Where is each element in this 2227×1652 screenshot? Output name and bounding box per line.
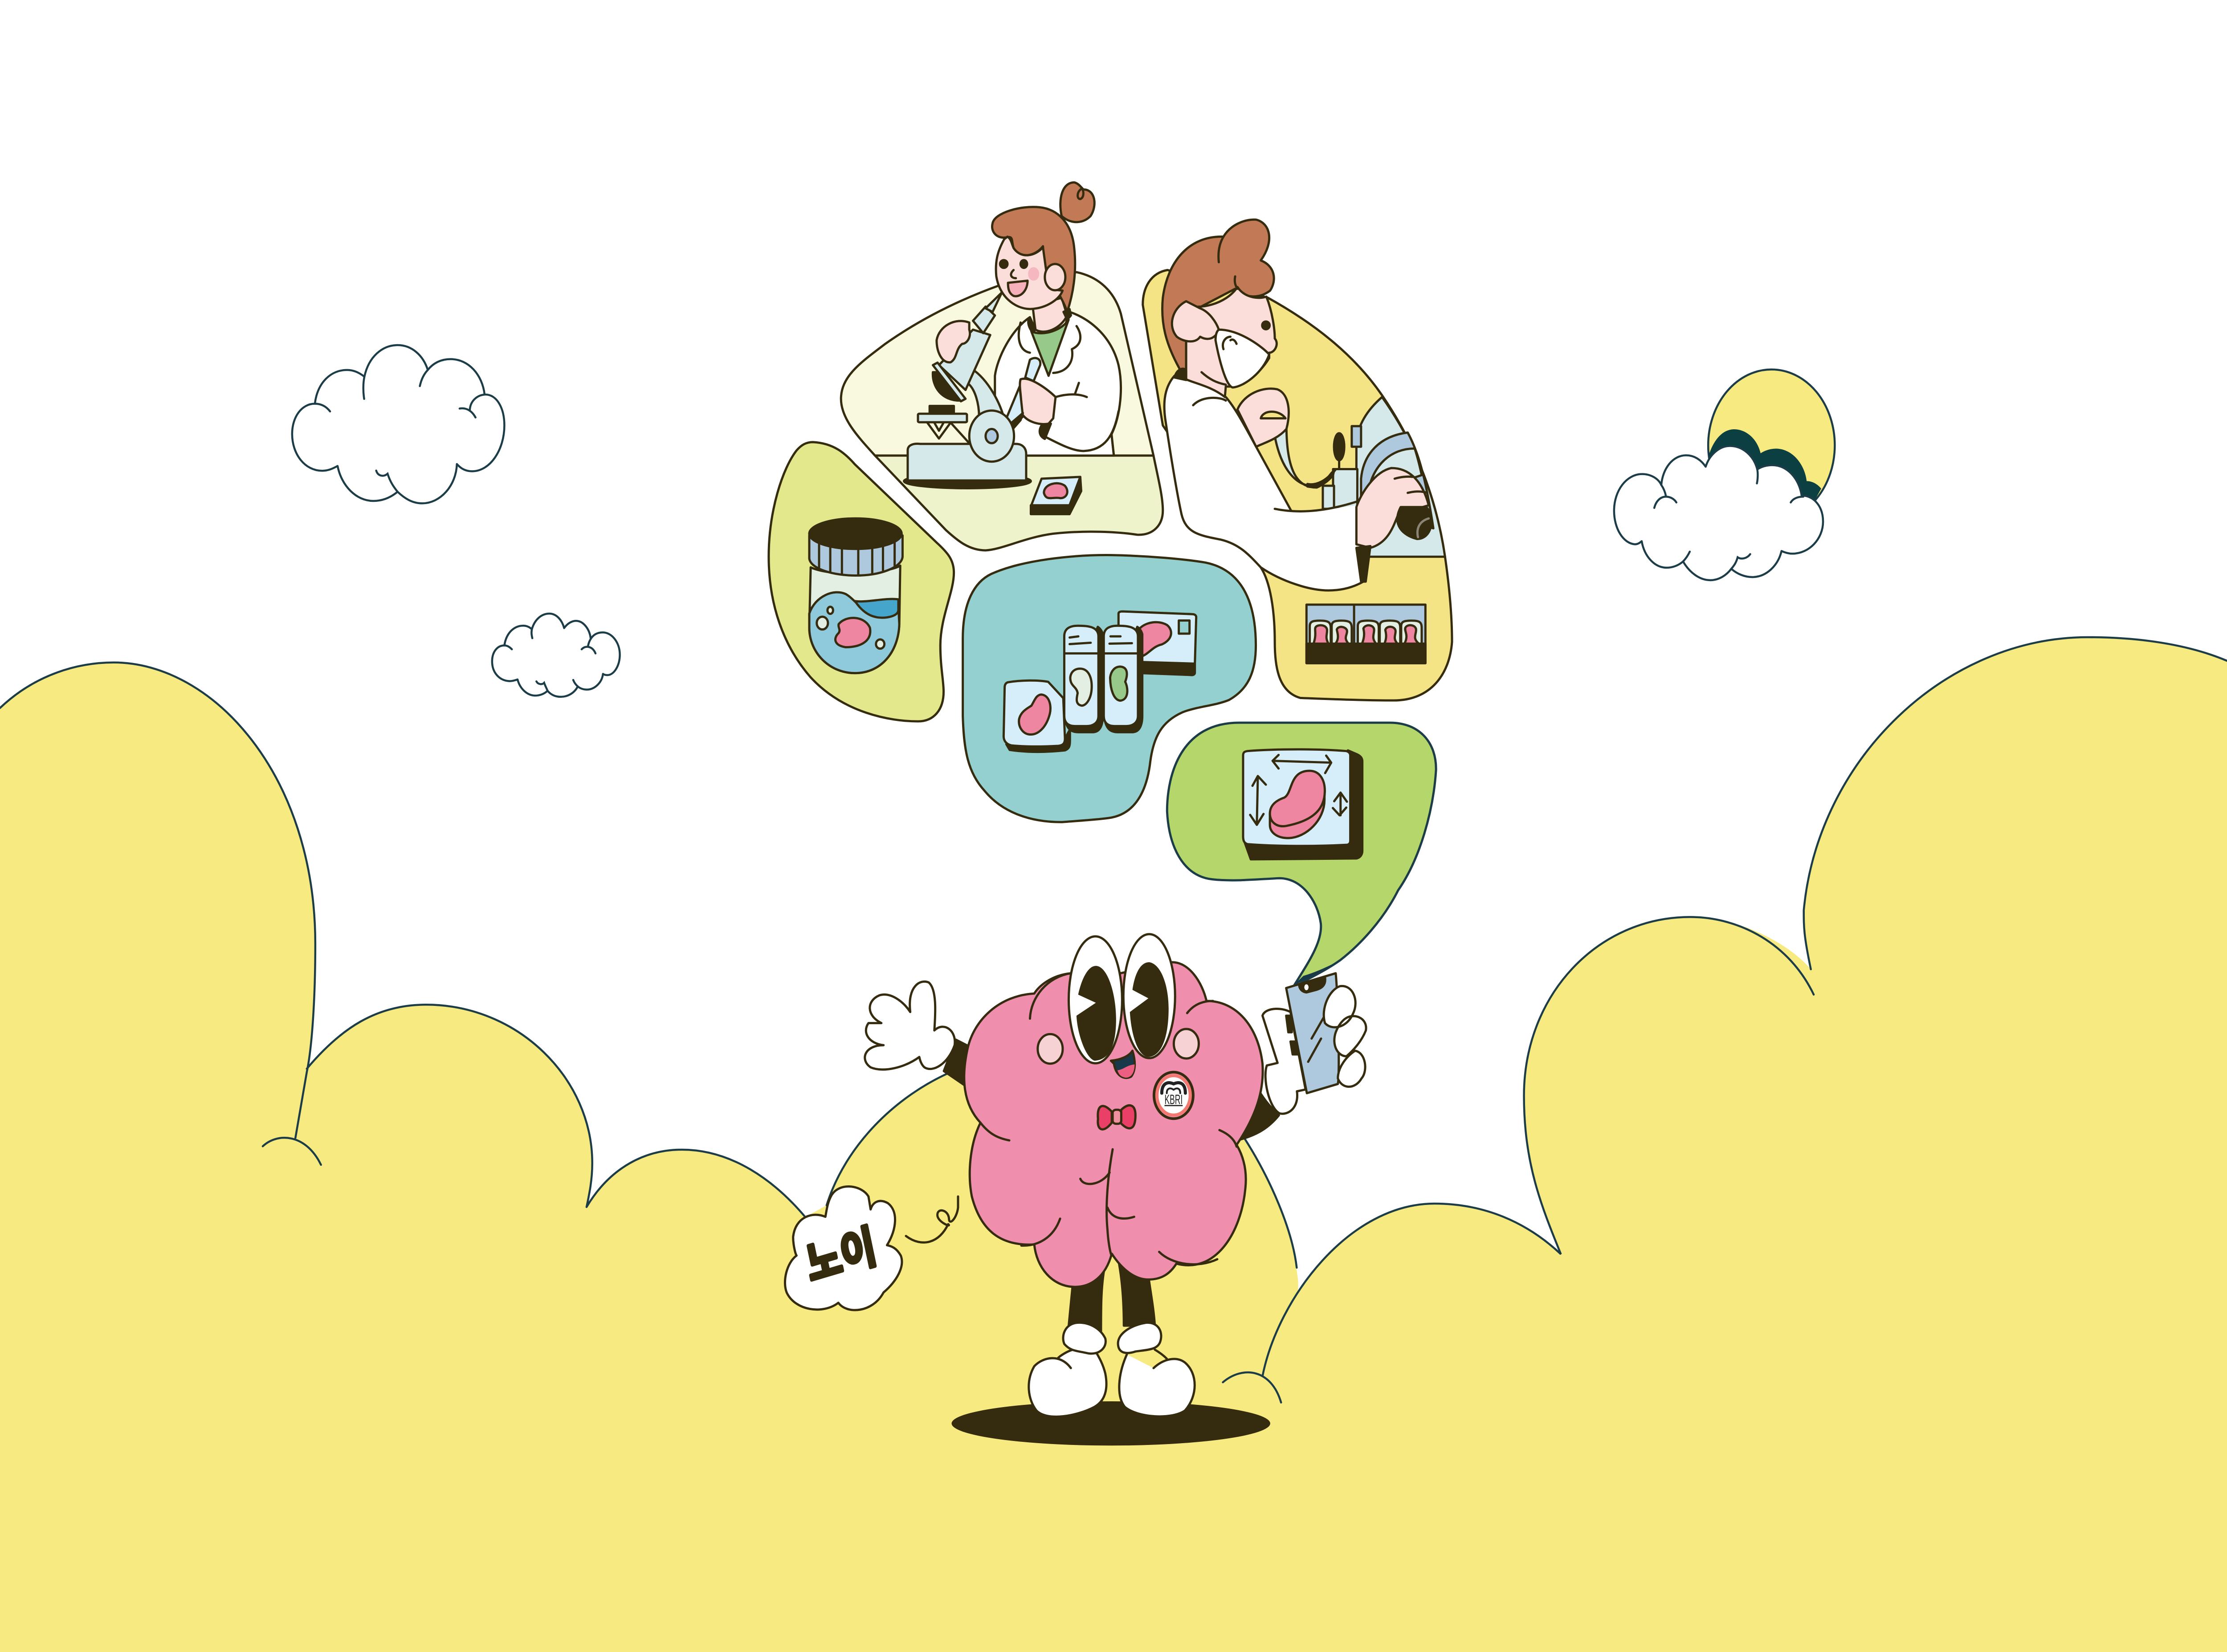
brain folds (980, 973, 1237, 1264)
microscope (904, 293, 1031, 488)
cloud: large left (292, 345, 504, 503)
cloud: right (1614, 446, 1823, 580)
legs (1069, 1259, 1155, 1331)
icon: tall slide pale (1064, 626, 1103, 732)
panel group: microscope, jar and operator (769, 183, 1452, 721)
cloud rim shadow (1709, 429, 1821, 500)
cheeks (1038, 1034, 1063, 1064)
mouth (1111, 1051, 1135, 1078)
icon: slide with dimension arrows (1243, 749, 1362, 859)
character: brain mascot (785, 934, 1366, 1445)
badge: KBRI logo: KBRI (1164, 1092, 1183, 1107)
machine (1275, 397, 1445, 557)
squiggle tail (906, 1196, 958, 1242)
panel: microscope researcher background (841, 272, 1163, 550)
left glove (865, 981, 955, 1070)
left sock (1063, 1322, 1105, 1354)
sun with right cloud (1614, 370, 1835, 580)
brain body (964, 962, 1263, 1287)
phone buttons (1286, 1016, 1298, 1054)
panel group: slides and measuring (963, 555, 1436, 989)
right glove palm (1263, 1009, 1305, 1114)
right shoe (1119, 1350, 1195, 1416)
sun (1708, 370, 1835, 521)
speech cloud (785, 1187, 902, 1310)
researcher with microscope (992, 183, 1121, 456)
icon: jar with brain tissue (809, 518, 902, 673)
bow tie (1098, 1105, 1135, 1129)
background: yellow cloud hills (0, 637, 2227, 1652)
panel: operator at microtome (1143, 220, 1452, 700)
operator in mask and lab coat (1162, 220, 1432, 590)
bubble tip shadow (1293, 960, 1340, 986)
right glove fingers (1324, 986, 1366, 1087)
panel: green speech bubble with measured slide (1167, 723, 1436, 989)
icon: back slide (1118, 611, 1196, 675)
badge: KBRI logo (1154, 1072, 1193, 1119)
phone (1286, 973, 1339, 1093)
cloud: small left (492, 614, 620, 697)
left shoe (1029, 1350, 1106, 1416)
clouds: large and small left (292, 345, 620, 697)
tissue block on table (1031, 477, 1081, 514)
right eye (1123, 934, 1175, 1058)
slide tray with five samples (1306, 605, 1425, 663)
right sock (1118, 1322, 1161, 1353)
icon: front slide (1003, 680, 1070, 752)
panel: specimen jar (769, 442, 954, 721)
ground shadow (951, 1401, 1270, 1445)
left eye (1069, 936, 1122, 1063)
speech label: 노이 (802, 1221, 881, 1291)
icon: tall slide green (1104, 626, 1142, 732)
arms (944, 1040, 1279, 1139)
panel: slide preparation (963, 555, 1256, 822)
